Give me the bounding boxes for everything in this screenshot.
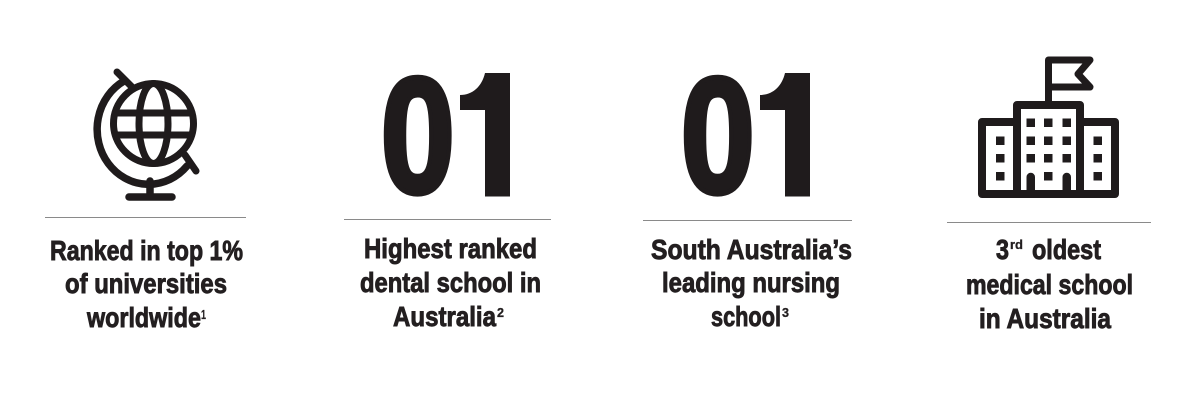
text: highest ranked dental school: 2 [497, 305, 504, 320]
text: highest ranked dental school: dental school in [360, 267, 541, 298]
big number: 01 nursing: 01 [680, 43, 833, 228]
icon: desk globe [97, 72, 196, 197]
text: third oldest medical school [966, 234, 1133, 334]
panel: third oldest medical school [947, 60, 1151, 334]
text: ranked in top 1%: Ranked in top 1% [50, 235, 243, 266]
text: ranked in top 1% [50, 235, 243, 333]
text: leading nursing school [651, 234, 852, 332]
text: third oldest medical school: medical school [966, 269, 1133, 300]
text: third oldest medical school: in Australia [979, 303, 1112, 334]
text: leading nursing school: 3 [782, 305, 789, 320]
panel: top 1% ranking [45, 72, 246, 333]
text: highest ranked dental school [360, 233, 541, 332]
text: highest ranked dental school: Highest ranked [364, 233, 537, 264]
icon: school building with flag [982, 60, 1115, 194]
text: third oldest medical school: 3 [996, 234, 1009, 265]
text: third oldest medical school: rd [1010, 237, 1023, 252]
text: leading nursing school: South Australia’s [651, 234, 852, 265]
text: ranked in top 1%: worldwide [86, 302, 201, 333]
text: leading nursing school: school [711, 301, 781, 332]
text: ranked in top 1%: of universities [65, 268, 227, 299]
big number: 01 dental: 01 [380, 43, 533, 228]
text: third oldest medical school: oldest [1032, 234, 1101, 265]
text: highest ranked dental school: Australia [393, 301, 497, 332]
text: leading nursing school: leading nursing [662, 267, 840, 298]
panel: leading nursing school [643, 43, 852, 332]
panel: highest ranked dental school [344, 43, 551, 332]
text: ranked in top 1%: 1 [201, 307, 206, 322]
